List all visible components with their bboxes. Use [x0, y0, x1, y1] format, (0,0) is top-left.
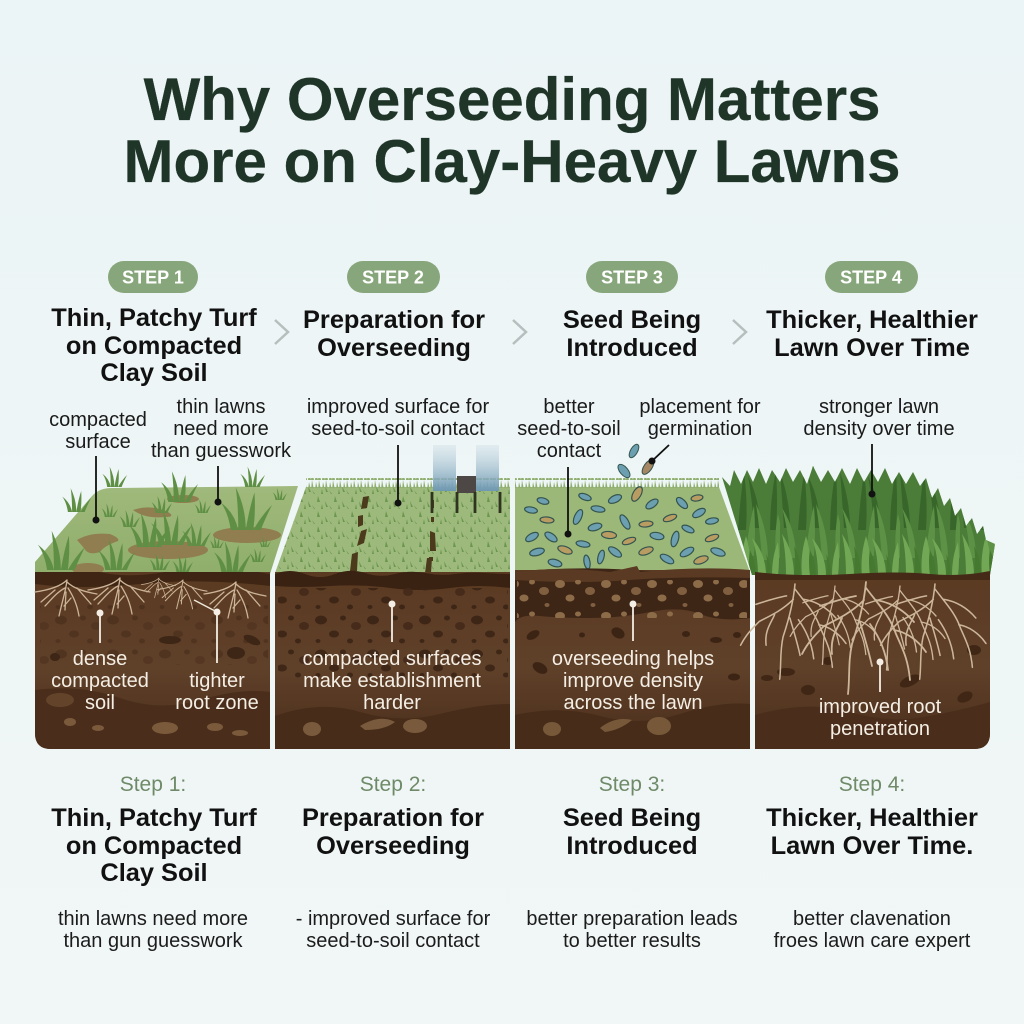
- grass tufts: [38, 467, 287, 572]
- soil leader: [388, 600, 396, 642]
- dark seed layer: [515, 568, 750, 622]
- panel: step 2 preparation: [275, 445, 510, 749]
- callouts above step 3: placement for: [639, 396, 761, 418]
- heading: step 1: on Compacted: [66, 332, 242, 360]
- callouts above step 3: better: [543, 396, 595, 418]
- soil label: [819, 696, 942, 740]
- callouts above step 1: than guesswork: [151, 440, 292, 462]
- heading: step 3: Introduced: [566, 334, 698, 362]
- root link line: [194, 600, 217, 612]
- lower soil: [515, 703, 750, 749]
- summary: step 4: better clavenation: [793, 908, 951, 930]
- germination pointer: [648, 445, 669, 464]
- step 2 badge: [347, 261, 440, 293]
- step 4 badge: [825, 261, 918, 293]
- soil label: compacted surfaces: [303, 648, 481, 670]
- step 1 badge: [108, 261, 198, 293]
- summary: step 4: Lawn Over Time.: [771, 832, 973, 860]
- heading: step 2: Overseeding: [317, 334, 471, 362]
- seeds on surface: [524, 485, 726, 569]
- callout above step 4: stronger lawn: [819, 396, 939, 418]
- surface leader: [564, 467, 572, 538]
- heading: step 2: [303, 306, 485, 362]
- heading: step 1: Thin, Patchy Turf: [51, 304, 257, 332]
- surface leader: [394, 445, 402, 506]
- summary: step 3: [526, 773, 738, 952]
- heading: step 1: Clay Soil: [100, 359, 208, 387]
- soil: [35, 568, 270, 750]
- title: [124, 66, 900, 195]
- summary: step 2: Step 2:: [360, 773, 426, 796]
- summary: step 4: [766, 773, 978, 952]
- surface leader: [868, 444, 876, 498]
- panel: step 3 seed: [515, 443, 750, 749]
- heading: step 4: Thicker, Healthier: [766, 306, 978, 334]
- lower stones: [303, 719, 427, 736]
- summary: step 3: better preparation leads: [526, 908, 738, 930]
- callouts above step 3: germination: [648, 418, 752, 440]
- summary: step 2: [296, 773, 491, 952]
- summary: step 1: Step 1:: [120, 773, 186, 796]
- lower stones: [543, 717, 671, 736]
- step 3 badge: [586, 261, 678, 293]
- soil label: improve density: [563, 670, 703, 692]
- title: Why Overseeding Matters: [144, 66, 880, 133]
- summary: step 2: Preparation for: [302, 804, 484, 832]
- arrow: step 1 to 2: [275, 320, 288, 344]
- step 3 badge: STEP 3: [601, 268, 663, 288]
- callouts above step 3: seed-to-soil: [517, 418, 621, 440]
- summary: step 2: seed-to-soil contact: [306, 930, 480, 952]
- callouts above step 1: need more: [173, 418, 269, 440]
- heading: step 3: Seed Being: [563, 306, 701, 334]
- soil label: [552, 648, 714, 714]
- soil labels: soil: [85, 692, 115, 714]
- soil label: improved root: [819, 696, 942, 718]
- soil: [275, 572, 510, 749]
- callout above step 2: improved surface for: [307, 396, 489, 418]
- turf surface: [275, 487, 510, 573]
- short grass texture: [275, 487, 510, 573]
- soil label: penetration: [830, 718, 930, 740]
- lower soil: [275, 704, 510, 749]
- arrow: step 2 to 3: [513, 320, 526, 344]
- summary: step 1: [51, 773, 257, 952]
- falling seeds: [616, 443, 656, 480]
- summary: step 1: than gun guesswork: [63, 930, 243, 952]
- summary: step 3: Step 3:: [599, 773, 665, 796]
- callout above step 4: density over time: [803, 418, 955, 440]
- summary: step 1: Thin, Patchy Turf: [51, 804, 257, 832]
- soil labels: tighter: [189, 670, 245, 692]
- callout above step 4: [803, 396, 955, 440]
- turf surface: [515, 487, 750, 572]
- callouts above step 1: compacted: [49, 409, 147, 431]
- soil stones: [278, 588, 508, 680]
- callouts above step 3: contact: [537, 440, 602, 462]
- seed layer stones: [517, 580, 747, 618]
- deep roots: [741, 582, 986, 694]
- summary: step 3: to better results: [563, 930, 701, 952]
- step 2 badge: STEP 2: [362, 268, 424, 288]
- callouts above step 3: [517, 396, 761, 462]
- soil leader: [630, 600, 636, 641]
- soil label: make establishment: [303, 670, 481, 692]
- grass fringe: [515, 478, 719, 488]
- soil label: overseeding helps: [552, 648, 714, 670]
- callouts above step 1: surface: [65, 431, 131, 453]
- soil label: across the lawn: [564, 692, 702, 714]
- callouts above step 1: thin lawns: [177, 396, 265, 418]
- step 4 badge: STEP 4: [840, 268, 902, 288]
- soil stones: [525, 625, 741, 680]
- step 1 badge: STEP 1: [122, 268, 184, 288]
- heading: step 3: [563, 306, 701, 362]
- summary: step 2: Overseeding: [316, 832, 470, 860]
- roots: [35, 578, 266, 618]
- title: More on Clay-Heavy Lawns: [124, 128, 900, 195]
- summary: step 4: froes lawn care expert: [774, 930, 971, 952]
- summary: step 4: Thicker, Healthier: [766, 804, 978, 832]
- aeration slits: [350, 496, 436, 573]
- summary: step 3: Seed Being: [563, 804, 701, 832]
- soil labels: dense: [73, 648, 127, 670]
- summary: step 4: Step 4:: [839, 773, 905, 796]
- summary: step 1: thin lawns need more: [58, 908, 248, 930]
- callout above step 2: [307, 396, 489, 440]
- arrow: step 3 to 4: [733, 320, 746, 344]
- summary: step 3: Introduced: [566, 832, 698, 860]
- panel: step 4 thicker lawn: [720, 444, 998, 750]
- heading: step 2: Preparation for: [303, 306, 485, 334]
- topsoil edge: [755, 571, 990, 580]
- soil leader: [876, 658, 884, 692]
- soil label: harder: [363, 692, 421, 714]
- turf surface: [35, 486, 298, 574]
- compacted crust: [275, 571, 510, 590]
- soil labels: compacted: [51, 670, 149, 692]
- summary: step 2: - improved surface for: [296, 908, 491, 930]
- soil leaders: [96, 608, 220, 663]
- soil: [515, 570, 750, 749]
- summary: step 1: Clay Soil: [100, 859, 208, 887]
- soil: [755, 568, 991, 750]
- summary: step 1: on Compacted: [66, 832, 242, 860]
- soil labels: [51, 648, 259, 714]
- soil label: [303, 648, 481, 714]
- dense grass: [720, 465, 998, 577]
- soil labels: root zone: [175, 692, 259, 714]
- grass fringe: [306, 478, 510, 488]
- topsoil band: [515, 566, 750, 582]
- aerator machine: [432, 445, 500, 513]
- callouts above step 1: [49, 396, 292, 462]
- panel: step 1 thin patchy turf: [35, 456, 298, 750]
- surface leaders: [92, 456, 222, 524]
- heading: step 4: [766, 306, 978, 362]
- heading: step 1: [51, 304, 257, 387]
- callout above step 2: seed-to-soil contact: [311, 418, 485, 440]
- bare patches: [72, 495, 281, 575]
- heading: step 4: Lawn Over Time: [774, 334, 970, 362]
